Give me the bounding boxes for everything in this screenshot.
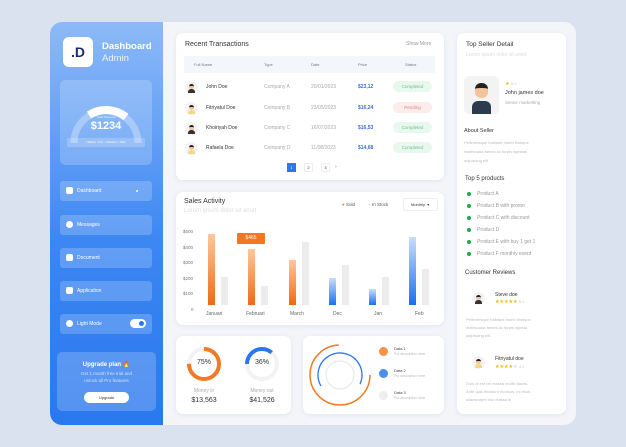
panel: recent transactions [176, 33, 444, 180]
row 3 [185, 122, 198, 135]
panel: top seller: Senior marketting [505, 100, 540, 105]
panel: sales activity: ● Sold [342, 202, 355, 207]
panel: money: 36% [255, 359, 269, 366]
panel: ring chart: Put description here [394, 396, 425, 400]
upgrade plan: Upgrade [99, 395, 114, 400]
panel: recent transactions: Recent Transactions [185, 41, 249, 48]
sidebar [50, 22, 163, 425]
text: Product B with promo [477, 203, 525, 209]
y axis labels: $500 [183, 229, 193, 234]
text: Product D [477, 227, 499, 233]
nav: light mode [60, 314, 152, 334]
panel: recent transactions: 11/08/2023 [311, 145, 336, 151]
x labels: Januari [206, 311, 222, 317]
panel: money [176, 336, 291, 414]
panel: top seller: Duis ut est vel massa mollis faucis. [466, 381, 528, 386]
panel: top seller: ★★★★★ 5.0 [495, 299, 524, 305]
panel: top seller [457, 33, 566, 414]
panel: sales activity: Monthly ▾ [411, 202, 429, 207]
panel: ring chart: Put description here [394, 374, 425, 378]
y axis labels: $100 [183, 291, 193, 296]
panel: recent transactions: $16,53 [358, 125, 373, 131]
panel: recent transactions: $23,12 [358, 84, 373, 90]
y axis labels: $300 [183, 260, 193, 265]
panel: top seller: adipiscing elit. [464, 158, 489, 163]
text: Product F monthly event [477, 251, 531, 257]
nav: dashboard [60, 181, 152, 201]
review 2 [472, 356, 485, 369]
nav: application: Application [77, 288, 101, 294]
gauge card: $1234 [91, 120, 121, 132]
panel: ring chart: Data 1 [394, 346, 406, 351]
panel: recent transactions: Company B [264, 105, 290, 111]
nav: messages [60, 215, 152, 235]
panel: recent transactions: Status [405, 62, 416, 67]
panel: recent transactions: 20/01/2023 [311, 84, 336, 90]
text: Product E with buy 1 get 1 [477, 239, 535, 245]
upgrade plan: Upgrade plan 🔥 [83, 362, 130, 368]
panel: recent transactions: Khoiriyah Doe [206, 125, 237, 131]
callout [237, 233, 265, 244]
panel: ring chart: Data 3 [394, 390, 406, 395]
upgrade plan: Get 1 month free trial and [81, 371, 132, 376]
panel: recent transactions: 16/07/2023 [311, 125, 336, 131]
panel: top seller: Customer Reviews [465, 270, 515, 276]
panel: money: 75% [197, 359, 211, 366]
panel: sales activity: Dec [333, 311, 342, 317]
panel: top seller: About Seller [464, 128, 494, 134]
panel: sales activity: Feb [415, 311, 424, 317]
panel: recent transactions: $14,68 [358, 145, 373, 151]
panel: top seller: ★ 5.0 [505, 81, 516, 87]
panel: recent transactions: Company A [264, 84, 290, 90]
review 1 [472, 292, 485, 305]
panel: recent transactions: Company D [264, 145, 290, 151]
panel: top seller: malesuada fames ac turpis egesta [466, 325, 527, 330]
panel: ring chart: Data 2 [394, 368, 406, 373]
panel: sales activity: Jan [374, 311, 382, 317]
panel: top seller: malesuada fames ac turpis egestas [464, 149, 527, 154]
panel: recent transactions: Completed [402, 145, 423, 150]
panel: top seller: ullamcorper nisl massa in [466, 397, 511, 402]
panel: top seller: ★★★★★ 4.0 [495, 364, 524, 370]
panel: money: Money out [250, 388, 274, 394]
panel: top seller: Lorem ipsum dolor sit amet [466, 52, 526, 58]
panel: recent transactions: › [335, 164, 337, 170]
panel: recent transactions: Company C [264, 125, 290, 131]
panel: recent transactions: Completed [402, 84, 423, 89]
y axis labels: $200 [183, 276, 193, 281]
panel: money: Money in [194, 388, 214, 394]
panel: ring chart: Put description here [394, 352, 425, 356]
panel: top seller: Fitriyatul doe [495, 356, 524, 362]
panel: top seller: Pellentesque habitant morbi tristique [466, 317, 531, 322]
panel: recent transactions: Price [358, 62, 367, 67]
callout: $465 [245, 235, 257, 241]
panel: top seller: Ante quis tincidunt rhoncus, mi risus [466, 389, 530, 394]
panel: recent transactions: Show More [406, 41, 431, 47]
logo: .D [71, 44, 85, 60]
panel: recent transactions: Fitriyatul Doe [206, 105, 235, 111]
y axis labels: $400 [183, 245, 193, 250]
panel: top seller: adipiscing elit. [466, 333, 491, 338]
panel: recent transactions: Full Name [194, 62, 212, 67]
gauge card: Total Revenue [96, 115, 116, 119]
panel: recent transactions: Type [264, 62, 273, 67]
panel: top seller: Top 5 products [465, 176, 504, 182]
panel: top seller: John james doe [505, 90, 544, 96]
sidebar title: Admin [102, 53, 129, 64]
pagination [287, 163, 296, 172]
panel: sales activity: Sales Activity [184, 198, 225, 205]
y axis labels [183, 229, 194, 312]
nav: messages: Messages [77, 222, 100, 228]
panel: ring chart [303, 336, 444, 414]
sidebar title: Dashboard [102, 41, 152, 52]
logo [63, 37, 93, 67]
product list: Product A [477, 191, 499, 197]
panel: sales activity: March [290, 311, 304, 317]
row 1 [185, 81, 198, 94]
panel: recent transactions: 3 [324, 165, 327, 170]
bars [208, 234, 429, 305]
panel: sales activity: Lorem ipsum dolor sit amet [184, 208, 256, 214]
panel: recent transactions: Pending [404, 105, 421, 110]
row 4 [185, 142, 198, 155]
y axis labels: 0 [191, 307, 194, 312]
nav: document [60, 248, 152, 268]
nav: light mode: Light Mode [77, 321, 102, 327]
panel: recent transactions: $16,24 [358, 105, 373, 111]
panel: recent transactions: 2 [307, 165, 310, 170]
upgrade plan [57, 352, 156, 411]
panel: money: $41,526 [249, 397, 275, 404]
row 2 [185, 102, 198, 115]
gauge card [60, 80, 152, 165]
panel: recent transactions: Rafaela Doe [206, 145, 234, 151]
panel: top seller: Pellentesque habitant morbi tristique [464, 140, 529, 145]
panel: sales activity [176, 192, 444, 325]
seller avatar [464, 76, 499, 114]
panel: recent transactions: Completed [402, 125, 423, 130]
text: Product C with discount [477, 215, 530, 221]
panel: sales activity: Februari [246, 311, 265, 317]
pagination: 1 [290, 165, 293, 170]
nav: dashboard: Dashboard [77, 188, 101, 194]
panel: top seller: Steve doe [495, 292, 518, 298]
nav: application [60, 281, 152, 301]
panel: recent transactions: John Doe [206, 84, 227, 90]
main frame [50, 22, 576, 425]
panel: top seller: Top Seller Detail [466, 41, 513, 48]
gauge card: • Weekly • Fun • Customer • Other [86, 141, 126, 144]
panel: money: $13,563 [191, 397, 217, 404]
panel: recent transactions: Date [311, 62, 319, 67]
panel: sales activity: ● In Stock [368, 202, 388, 207]
nav: document: Document [77, 255, 100, 261]
sidebar title [102, 41, 152, 64]
upgrade plan: unlock all Pro features [84, 378, 129, 383]
panel: recent transactions: 23/05/2023 [311, 105, 336, 111]
